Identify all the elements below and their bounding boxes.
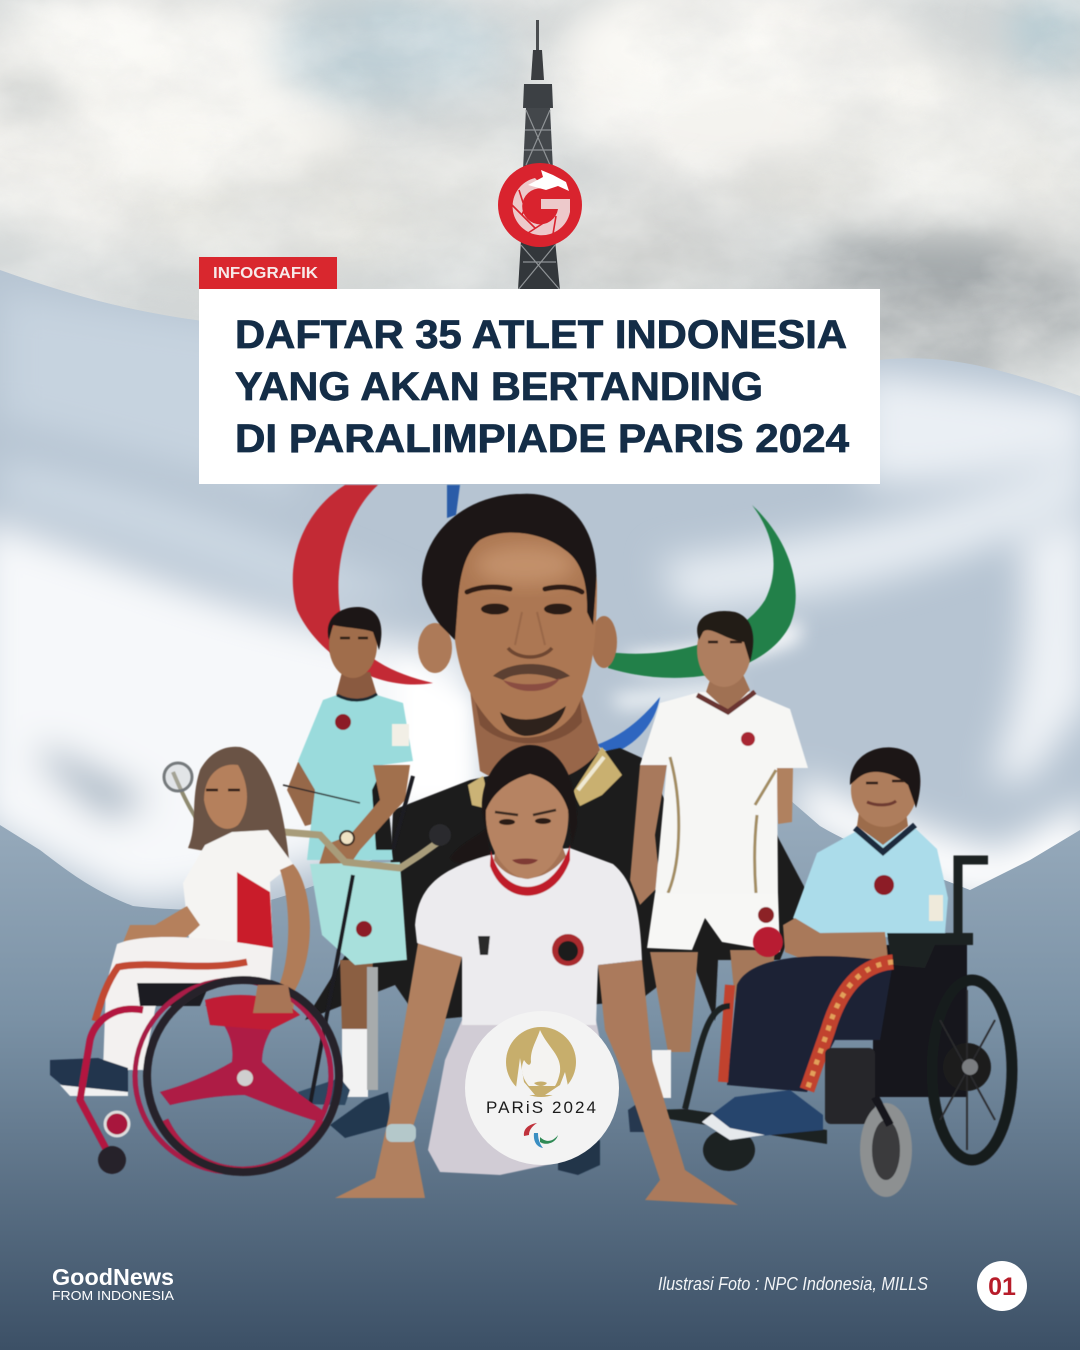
background: sky and clouds bbox=[0, 0, 1080, 400]
title text: DAFTAR 35 ATLET INDONESIA bbox=[235, 313, 847, 357]
title text: YANG AKAN BERTANDING bbox=[235, 365, 763, 409]
title card bbox=[199, 289, 880, 484]
title text bbox=[235, 313, 850, 461]
brand: GoodNews from Indonesia: FROM INDONESIA bbox=[52, 1289, 175, 1303]
icon: large agitos on flag bbox=[293, 485, 796, 754]
athlete: man in power wheelchair bbox=[650, 747, 1012, 1197]
icon: Paris 2024 Paralympic badge: PARiS 2024 bbox=[486, 1098, 596, 1117]
athlete: woman in wheelchair bbox=[50, 747, 339, 1174]
brand: GoodNews from Indonesia: GoodNews bbox=[52, 1264, 174, 1290]
jersey bbox=[305, 748, 807, 1021]
page number: 01 bbox=[988, 1273, 1016, 1301]
background: lower gradient bbox=[0, 780, 1080, 1350]
athlete: central woman bbox=[335, 745, 738, 1205]
page number bbox=[977, 1261, 1027, 1311]
badge: INFOGRAFIK bbox=[199, 257, 337, 290]
athlete: archer in teal jersey bbox=[164, 607, 451, 1138]
background: paralympic flag bbox=[0, 270, 1080, 910]
icon: Eiffel tower bbox=[518, 20, 560, 290]
athlete: central man portrait bbox=[305, 494, 807, 1021]
brand: GoodNews from Indonesia bbox=[52, 1264, 175, 1303]
title text: DI PARALIMPIADE PARIS 2024 bbox=[235, 417, 850, 461]
icon: GNFI garuda logo bbox=[498, 163, 582, 247]
icon: Paris 2024 Paralympic badge bbox=[465, 1011, 619, 1165]
badge: INFOGRAFIK: INFOGRAFIK bbox=[213, 265, 318, 282]
photo credit: Ilustrasi Foto : NPC Indonesia, MILLS bbox=[658, 1274, 928, 1294]
athlete: standing man in white polo bbox=[628, 611, 808, 1132]
